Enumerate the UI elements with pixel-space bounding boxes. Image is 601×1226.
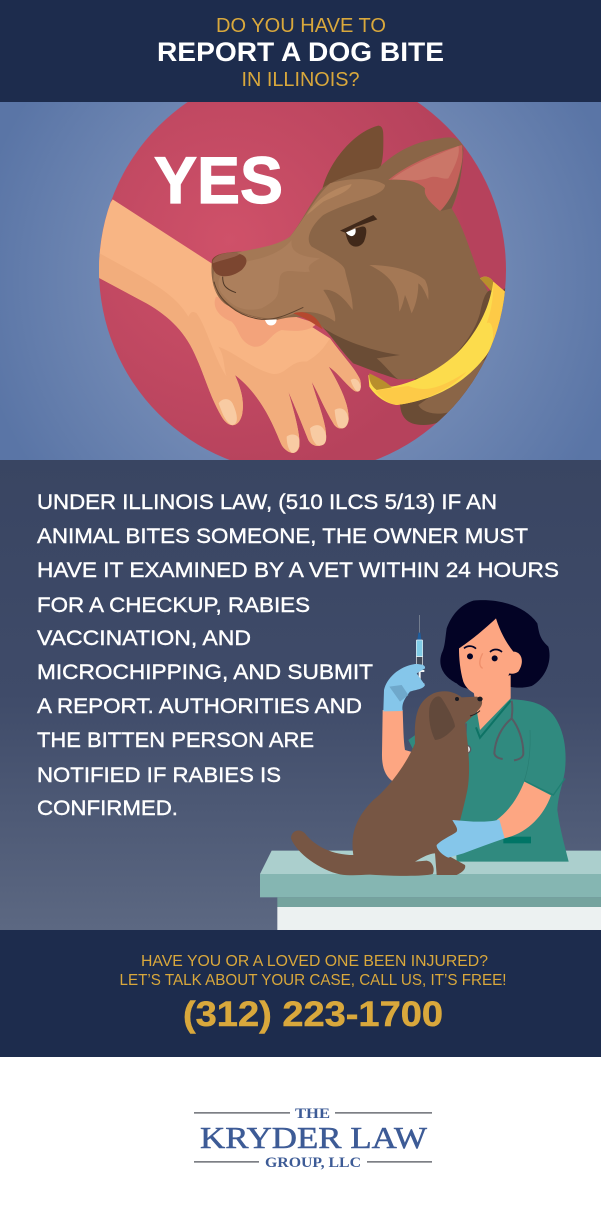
logo text: GROUP, LLC — [265, 1155, 361, 1171]
vet scrubs — [408, 699, 569, 862]
dog nose — [212, 253, 246, 276]
syringe — [415, 615, 424, 685]
dog jaw shadow — [322, 327, 400, 379]
yes label: YES — [154, 143, 283, 217]
text block: law explanation: THE BITTEN PERSON ARE — [37, 728, 314, 752]
panel: dog bite illustration — [0, 102, 601, 460]
logo text — [200, 1106, 428, 1171]
text block: law explanation: CONFIRMED. — [37, 796, 178, 820]
dog eye — [345, 226, 366, 247]
arm shading — [97, 252, 243, 425]
text block: law explanation: VACCINATION, AND — [37, 626, 251, 650]
stethoscope — [463, 701, 523, 760]
panel: explanation — [0, 460, 601, 930]
text block: law explanation: UNDER ILLINOIS LAW, (510 ILCS 5/13) IF AN — [37, 490, 497, 514]
panel: logo — [0, 1057, 601, 1226]
puppy — [291, 691, 483, 876]
logo text: KRYDER LAW — [200, 1120, 428, 1155]
red circle backdrop — [99, 102, 506, 460]
bite wound — [215, 297, 317, 347]
illustration: arm and dog — [90, 126, 507, 453]
icon: far ear — [322, 126, 383, 189]
text block: law explanation: FOR A CHECKUP, RABIES — [37, 593, 310, 617]
fingernails — [219, 399, 237, 425]
pocket — [503, 837, 531, 843]
dog tooth — [265, 319, 277, 325]
heading line: do you have to: DO YOU HAVE TO — [216, 15, 386, 37]
text block: law explanation: HAVE IT EXAMINED BY A VET WITHIN 24 HOURS — [37, 558, 559, 582]
icon: yellow collar — [368, 277, 505, 405]
dog muzzle highlight — [213, 179, 385, 322]
phone number: (312) 223-1700 — [183, 995, 443, 1034]
dog near ear — [388, 145, 463, 211]
cta text 2: LET’S TALK ABOUT YOUR CASE, CALL US, IT’S FREE! — [120, 972, 506, 989]
logo rules — [194, 1112, 432, 1163]
exam table — [260, 851, 601, 930]
logo text: THE — [295, 1106, 330, 1122]
text block: law explanation: A REPORT. AUTHORITIES AND — [37, 694, 362, 718]
text block: law explanation: ANIMAL BITES SOMEONE, THE OWNER MUST — [37, 524, 528, 548]
text block: law explanation — [37, 490, 559, 820]
dog mouth line — [214, 282, 303, 319]
panel: call to action — [0, 930, 601, 1057]
dog cheek fur — [369, 265, 428, 313]
vet arm raised — [382, 710, 417, 783]
heading line: report a dog bite: REPORT A DOG BITE — [157, 37, 444, 67]
text block: law explanation: NOTIFIED IF RABIES IS — [37, 763, 281, 787]
gloved lower hand — [437, 819, 505, 858]
vet hair — [440, 600, 550, 689]
cta text: HAVE YOU OR A LOVED ONE BEEN INJURED? — [141, 953, 488, 970]
vet face details — [464, 646, 502, 668]
heading line: in illinois: IN ILLINOIS? — [242, 69, 360, 91]
panel: title header — [0, 0, 601, 102]
gloved raised hand — [383, 664, 425, 711]
vet neck and face — [470, 675, 511, 730]
text block: law explanation: MICROCHIPPING, AND SUBMIT — [37, 660, 373, 684]
vet near arm — [497, 782, 551, 838]
illustration: vet with dog on exam table — [260, 600, 601, 930]
icon: hand and arm — [90, 199, 361, 453]
icon: dog head — [211, 137, 490, 379]
icon: dog neck and body — [400, 287, 507, 425]
